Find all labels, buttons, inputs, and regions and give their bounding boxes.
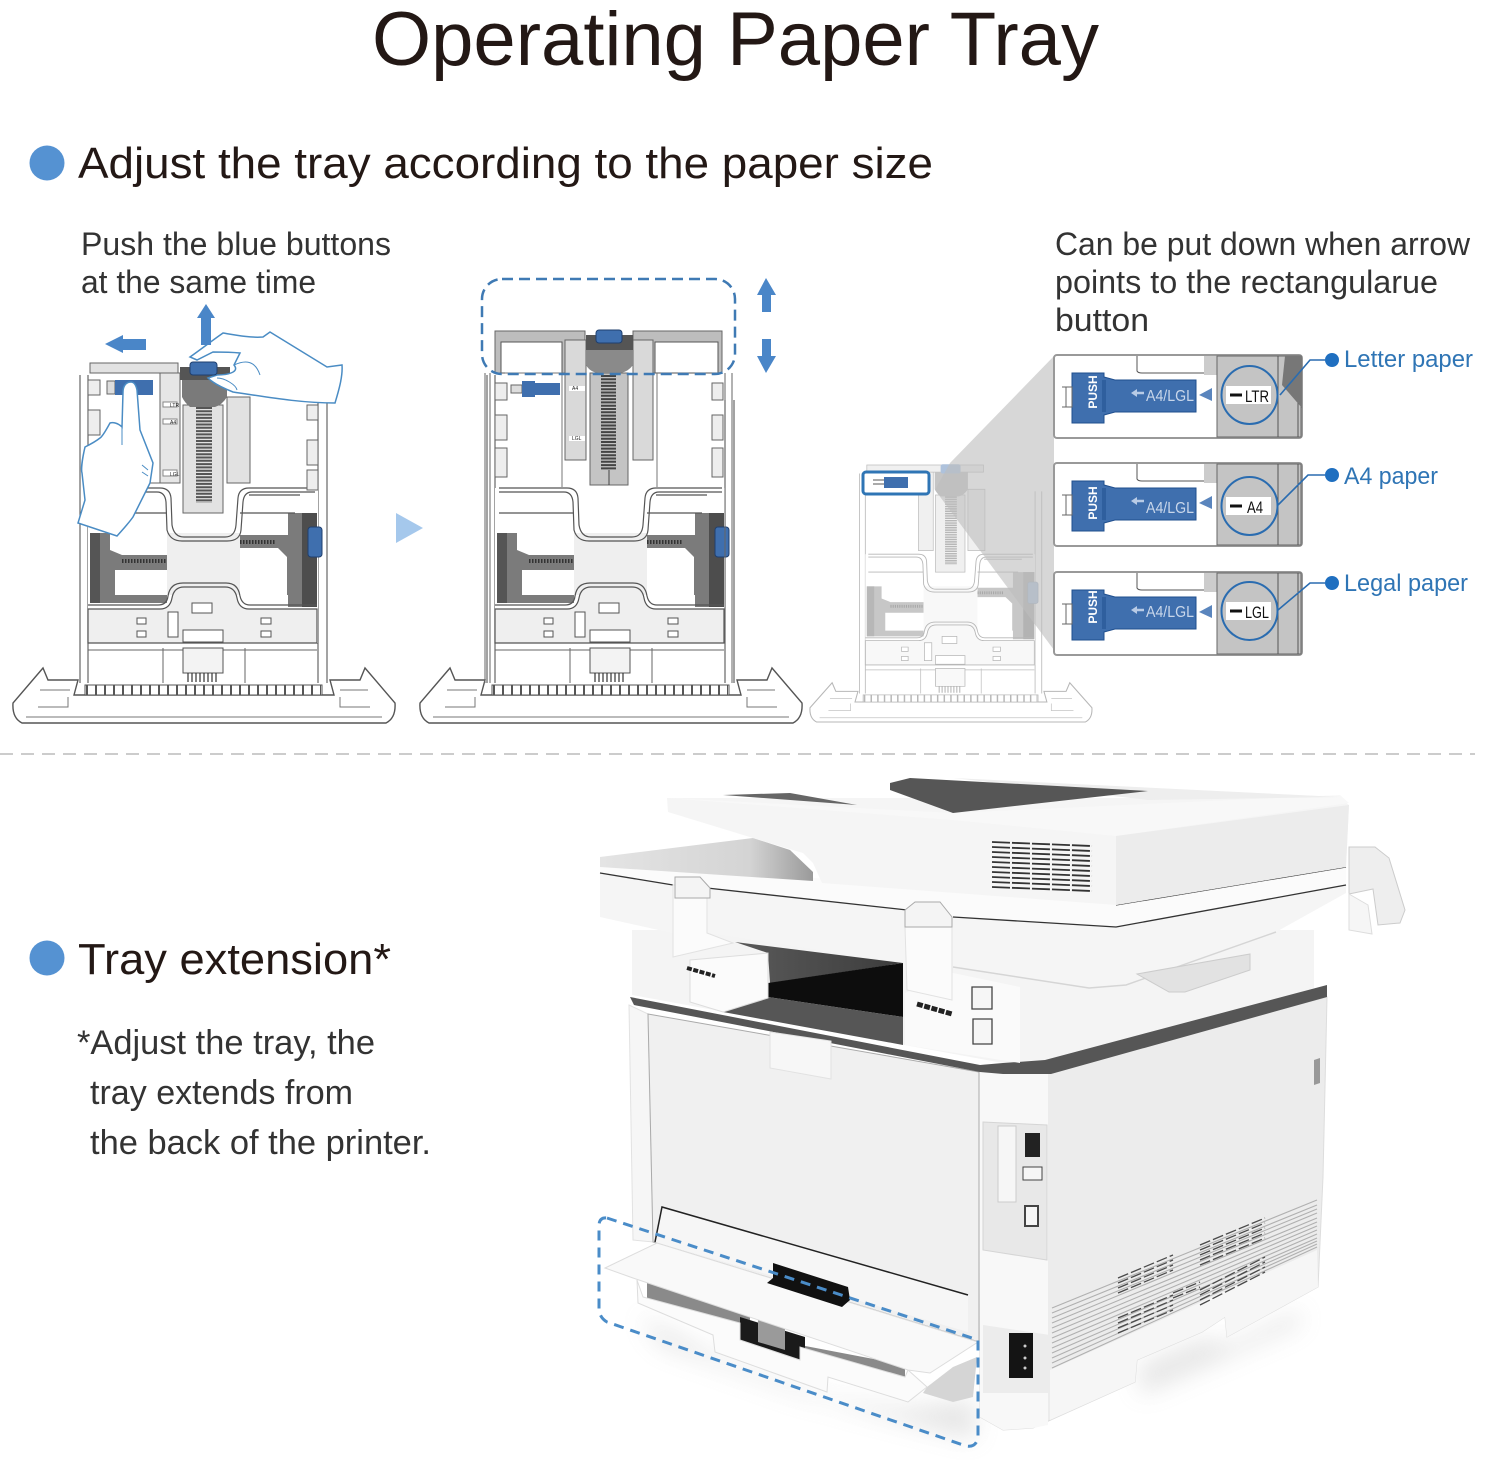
label LTR: LTR <box>1245 387 1269 406</box>
power recess <box>983 1325 1050 1393</box>
lid front face <box>667 798 1349 905</box>
panel: legal paper <box>1054 572 1302 655</box>
left support box <box>690 953 768 1012</box>
left dark tray <box>723 793 857 805</box>
arrow: up <box>197 304 215 345</box>
side grille <box>1052 1200 1317 1368</box>
connector squares <box>972 987 992 1044</box>
text block: put down instruction: points to the rectangularue <box>1055 264 1438 300</box>
scanner underside <box>600 873 1346 988</box>
panel: legal paper: A4/LGL <box>1146 604 1194 621</box>
heading: adjust the tray: Adjust the tray according to the paper size <box>78 139 933 188</box>
tray recess dark <box>647 1282 905 1380</box>
callout: a4 paper <box>1278 463 1438 505</box>
tray slider upper part: LGL <box>170 472 180 478</box>
blue button on top <box>190 362 217 375</box>
flatbed <box>600 838 813 881</box>
tray slider upper part: LTR <box>170 403 179 409</box>
rear strip <box>629 1005 653 1242</box>
text block: push instruction: Push the blue buttons <box>81 226 391 262</box>
callout: letter paper <box>1280 346 1473 395</box>
left stripes <box>687 968 715 976</box>
printer right face <box>979 997 1327 1430</box>
diagram: tray extended <box>420 278 802 723</box>
panel: a4 paper: A4/LGL <box>1146 500 1194 517</box>
ethernet port <box>1025 1133 1040 1157</box>
dark band <box>630 985 1327 1074</box>
panel: legal paper: PUSH <box>1086 590 1100 624</box>
text block: put down instruction <box>1055 226 1471 338</box>
printer illustration <box>599 778 1405 1446</box>
right hinge <box>905 902 952 927</box>
dark shelf <box>723 997 903 1045</box>
text block: push instruction: at the same time <box>81 264 316 300</box>
left column <box>673 885 733 957</box>
tray front <box>637 1280 927 1402</box>
callout: letter paper: Letter paper <box>1344 346 1473 373</box>
arrow: step to next diagram <box>396 513 423 543</box>
arrow: down <box>757 339 776 373</box>
power socket <box>1009 1333 1033 1378</box>
callout: a4 paper: A4 paper <box>1344 463 1438 490</box>
flap <box>605 1243 978 1373</box>
dashed box: tray extension <box>599 1218 978 1446</box>
diagram: faded tray with zoom wedge <box>810 356 1092 722</box>
text block: push instruction <box>81 226 391 300</box>
black handle <box>767 1263 850 1307</box>
panel: a4 paper: PUSH <box>1086 486 1100 520</box>
callout: legal paper <box>1278 570 1468 610</box>
top light strip <box>953 778 1340 800</box>
tray right mechanism <box>923 1357 977 1402</box>
diagram: tray with hands pressing buttons <box>13 304 395 723</box>
label A4: A4 <box>1247 498 1263 517</box>
panel: letter paper: PUSH <box>1086 375 1100 409</box>
corner <box>1282 356 1302 408</box>
lower panel <box>655 1207 968 1332</box>
panel: letter paper <box>1054 355 1302 438</box>
underside wedge <box>1137 954 1250 992</box>
vent <box>992 842 1092 891</box>
tray slider extended <box>485 330 732 683</box>
tray slider extended: A4 <box>572 386 578 392</box>
dashed box: extended section <box>482 279 735 374</box>
usb host port <box>1023 1167 1042 1180</box>
faded tray <box>810 464 1092 722</box>
usb device port <box>1025 1206 1038 1226</box>
mid body <box>632 930 1314 1070</box>
lid top face <box>667 795 1349 836</box>
text block: put down instruction: Can be put down when arrow <box>1055 226 1471 262</box>
corner column <box>979 1072 1048 1430</box>
right column <box>905 927 952 1000</box>
callout: legal paper: Legal paper <box>1344 570 1468 597</box>
opening: dark wall <box>735 942 903 983</box>
text block: put down instruction: button <box>1055 302 1149 338</box>
scanner seam lines <box>600 873 1346 927</box>
lid right face <box>1116 805 1349 905</box>
label LGL: LGL <box>1245 603 1269 622</box>
arrow: up <box>757 278 776 312</box>
text block: tray extension note: *Adjust the tray, the <box>77 1024 375 1062</box>
left hinge <box>675 877 710 898</box>
side paper holder <box>1349 847 1405 925</box>
text block: tray extension note: tray extends from <box>90 1074 353 1112</box>
bullet dot <box>30 146 64 180</box>
right stripes <box>917 1004 952 1014</box>
label LTR <box>1226 386 1271 406</box>
right lower block <box>905 973 1020 1063</box>
ground shadow <box>640 1310 1300 1440</box>
tray slider upper part: A4 <box>170 420 176 426</box>
text block: tray extension note <box>77 1024 431 1162</box>
tray slider extended: LGL <box>572 436 582 442</box>
panel: a4 paper <box>1054 463 1302 546</box>
rear face <box>648 1014 979 1342</box>
scanner lid band <box>600 867 1346 927</box>
label LGL <box>1226 602 1271 622</box>
panel: letter paper: A4/LGL <box>1146 388 1194 405</box>
tray slider upper part <box>88 363 318 513</box>
label A4 <box>1226 497 1271 517</box>
opening: black cavity <box>768 963 903 1017</box>
arrow: left <box>105 335 146 353</box>
hand: finger on left button <box>78 382 153 536</box>
port recess <box>983 1122 1047 1260</box>
bullet dot <box>30 940 64 976</box>
hand: thumb and fingers on top button <box>190 332 342 403</box>
text block: tray extension note: the back of the printer. <box>90 1124 431 1162</box>
heading: tray extension: Tray extension* <box>78 935 391 984</box>
dark adf tray <box>890 778 1148 813</box>
side edge slit <box>1314 1058 1320 1085</box>
zoom wedge <box>935 356 1054 650</box>
highlighted button box <box>863 472 929 494</box>
tab <box>770 1032 831 1079</box>
center mechanism <box>740 1317 805 1362</box>
printer foot <box>1050 1250 1318 1420</box>
